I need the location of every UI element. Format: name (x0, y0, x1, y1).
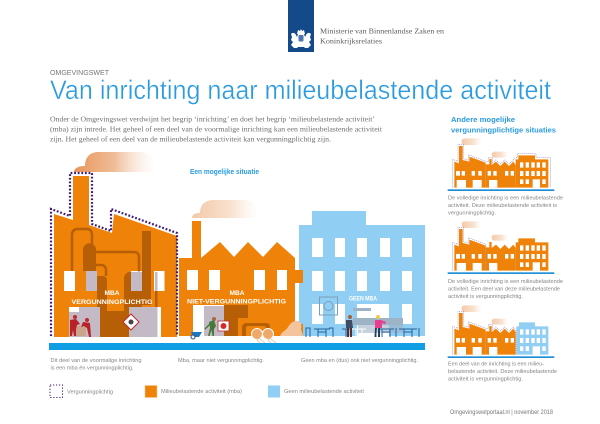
smoke cloud: large (74, 152, 155, 172)
heading: other situations: vergunningplichtige situaties (451, 126, 556, 134)
workers with box (70, 315, 91, 337)
ministry name (320, 26, 444, 46)
caption scenario 2: activiteit is vergunningplichtig. (448, 294, 523, 300)
caption scenario 2: activiteit. Een deel van deze milieubelastende (448, 286, 560, 292)
person: woman on terrace (374, 315, 386, 337)
label: mba permit-required (72, 290, 152, 306)
caption: not permit-required: Mba, maar niet vergunningplichtig. (178, 358, 264, 364)
logo: Rijksoverheid (288, 0, 314, 52)
machinery overlay second factory (204, 305, 270, 336)
caption scenario 1: De volledige inrichting is een milieubelastende (448, 196, 563, 202)
caption scenario 1 (448, 196, 563, 216)
caption scenario 1: activiteit. Deze milieubelastende activiteit is (448, 203, 557, 209)
caption: permit-required: Dit deel van de voormalige inrichting (50, 358, 142, 364)
footer: Omgevingswetportaal.nl | november 2018 (450, 410, 554, 416)
pipes and peach smoke at sewer (252, 321, 303, 346)
legend: permit-required (50, 385, 113, 398)
building: orange permit-required (54, 176, 177, 337)
hazard sign (123, 314, 139, 330)
restaurant sign (320, 297, 338, 315)
small scenario 2: part permit-required (448, 221, 554, 274)
title: Van inrichting naar milieubelastende activiteit (50, 75, 552, 105)
caption scenario 3 (448, 362, 557, 382)
windows second factory (187, 270, 287, 336)
label: no mba: GEEN MBA (349, 296, 377, 302)
heading: other situations: Andere mogelijke (451, 115, 515, 124)
building: orange not permit-required (179, 221, 303, 336)
small scenario 1: all permit-required (448, 138, 554, 191)
worker with wheelbarrow (191, 317, 216, 339)
smoke cloud: second (192, 200, 258, 218)
permit boundary: dotted line (51, 173, 177, 336)
building: blue no-mba (299, 211, 425, 336)
legend: no mba: Geen milieubelastende activiteit (284, 389, 364, 395)
terrace overlay (353, 308, 403, 333)
intro text: Onder de Omgevingswet verdwijnt het begrip ‘inrichting’ en doet het begrip ‘milieubelastende activiteit’ (50, 114, 375, 124)
ministry name: Ministerie van Binnenlandse Zaken en (320, 26, 444, 36)
label: mba permit-required: VERGUNNINGPLICHTIG (72, 299, 152, 306)
caption: no mba: Geen mba en (dus) ook niet vergunningplichtig. (301, 358, 418, 364)
caption scenario 1: vergunningplichtig. (448, 210, 496, 216)
label: mba not permit-required (187, 290, 286, 306)
label: mba not permit-required: MBA (229, 290, 245, 297)
intro text: (mba) zijn intrede. Het geheel of een deel van de voormalige inrichting kan een milieubelastende activiteit (50, 124, 383, 134)
terrace tables and chairs (306, 328, 419, 337)
kicker: OMGEVINGSWET (50, 70, 110, 77)
person: man on terrace (346, 315, 353, 337)
legend: mba (145, 386, 242, 398)
caption scenario 2 (448, 279, 563, 300)
heading: main situation: Een mogelijke situatie (190, 167, 259, 176)
ministry name: Koninkrijksrelaties (320, 36, 382, 46)
caption: permit-required (50, 358, 142, 372)
water bar (49, 343, 425, 350)
fire hazard sign (218, 321, 229, 331)
blue building windows (312, 238, 412, 336)
label: mba permit-required: MBA (104, 290, 120, 297)
caption scenario 3: activiteit is vergunningplichtig. (448, 376, 523, 382)
legend: no mba (268, 386, 364, 398)
windows first factory (64, 271, 164, 337)
intro text: zijn. Het geheel of een deel van de milieubelastende activiteit kan vergunningplichtig zijn. (50, 134, 331, 144)
small scenario 3: part mba (448, 305, 554, 358)
caption scenario 3: Een deel van de inrichting is een milieu- (448, 362, 544, 368)
legend: permit-required: Vergunningplichtig (67, 390, 113, 396)
caption: permit-required: is een mba én vergunningplichtig. (50, 366, 134, 372)
caption scenario 2: De volledige inrichting is een milieubelastende (448, 279, 563, 285)
intro text (50, 114, 383, 144)
caption scenario 3: belastende activiteit. Deze milieubelastende (448, 369, 557, 375)
label: mba not permit-required: NIET-VERGUNNINGPLICHTIG (187, 298, 286, 306)
machinery overlay first factory (69, 229, 158, 337)
legend: mba: Milieubelastende activiteit (mba) (161, 389, 242, 395)
heading: other situations (451, 115, 556, 134)
